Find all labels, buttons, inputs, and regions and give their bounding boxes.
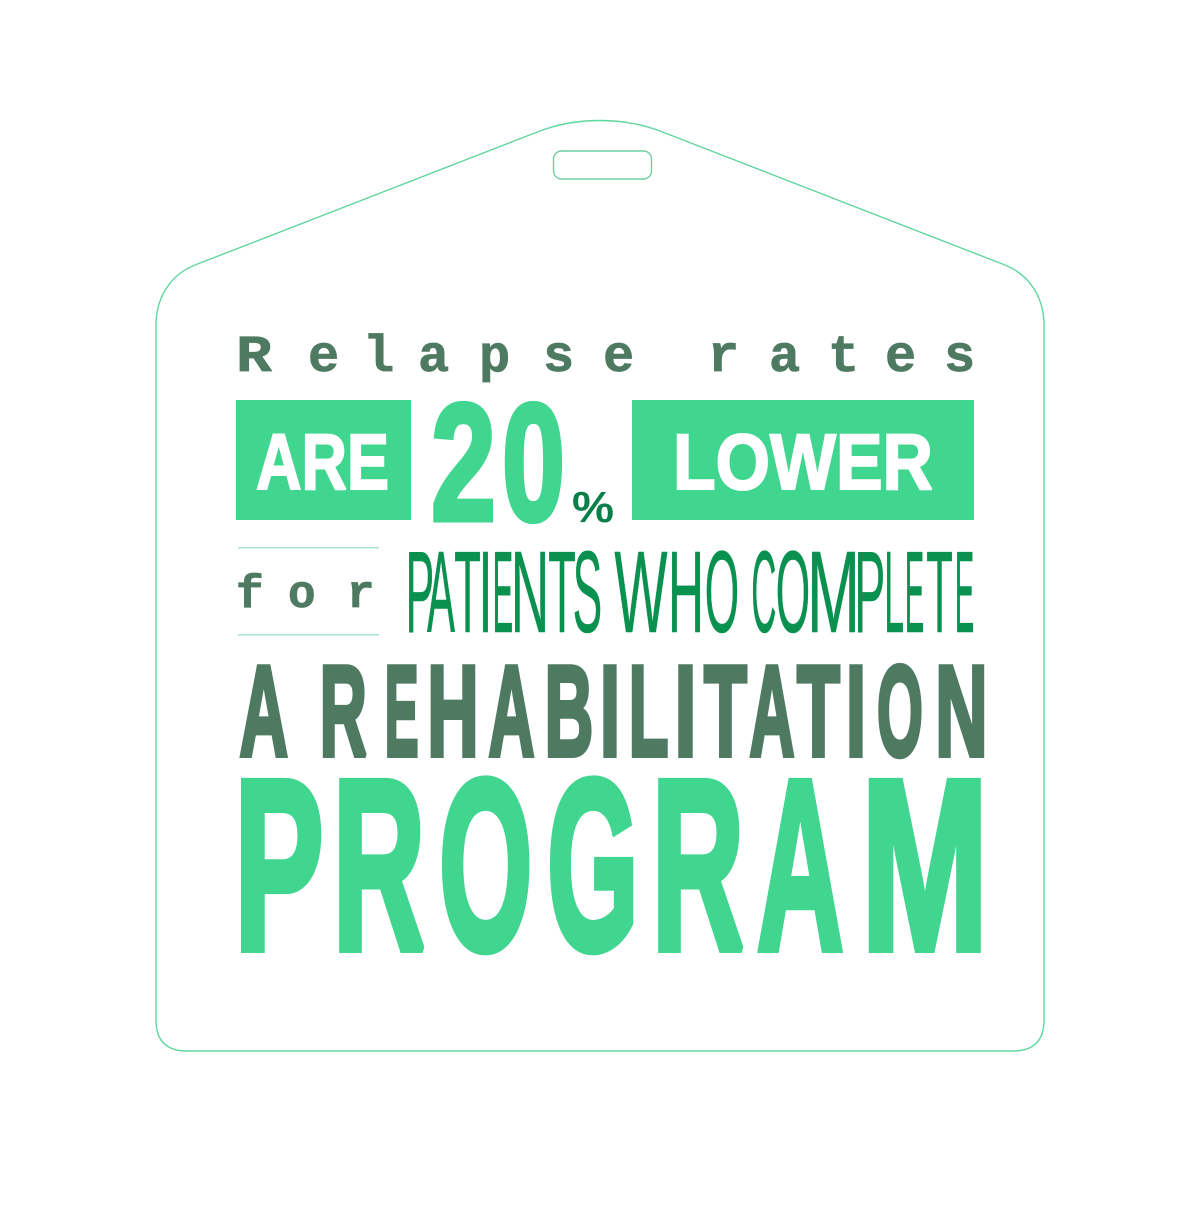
text: program: M bbox=[861, 730, 988, 1001]
text: a rehabilitation: A bbox=[488, 640, 534, 784]
text: a rehabilitation: B bbox=[545, 640, 593, 784]
text: a rehabilitation: I bbox=[600, 640, 620, 784]
text: patients who complete: P bbox=[406, 527, 434, 657]
heading: Relapse rates: p bbox=[479, 328, 510, 387]
text: a rehabilitation: N bbox=[935, 640, 988, 784]
badge outline bbox=[156, 120, 1044, 1051]
text: patients who complete: O bbox=[776, 527, 810, 657]
text: patients who complete: T bbox=[454, 527, 481, 657]
text: patients who complete: C bbox=[751, 527, 776, 657]
statistic: 20% bbox=[431, 370, 614, 556]
text: program: R bbox=[652, 730, 744, 1001]
heading: Relapse rates: r bbox=[708, 328, 739, 387]
heading: Relapse rates: R bbox=[236, 328, 273, 387]
text: patients who complete: H bbox=[668, 527, 704, 657]
heading: Relapse rates: a bbox=[418, 328, 449, 387]
text: a rehabilitation: R bbox=[320, 640, 367, 784]
text: program: A bbox=[757, 730, 844, 1001]
text: patients who complete: T bbox=[926, 527, 953, 657]
text: patients who complete: N bbox=[511, 527, 549, 657]
text: patients who complete: A bbox=[427, 527, 455, 657]
heading: Relapse rates: e bbox=[308, 328, 339, 387]
text: for, between rules: for bbox=[236, 569, 375, 621]
heading: Relapse rates: e bbox=[603, 328, 634, 387]
text: program: G bbox=[547, 730, 639, 1001]
statistic: 20%: % bbox=[572, 483, 614, 532]
text: patients who complete: M bbox=[807, 527, 860, 657]
text: patients who complete: L bbox=[884, 527, 904, 657]
text: patients who complete: S bbox=[573, 527, 602, 657]
panel: ARE label bbox=[236, 400, 411, 520]
text: program: P bbox=[234, 730, 324, 1001]
heading: Relapse rates: e bbox=[885, 328, 916, 387]
text: patients who complete: P bbox=[854, 527, 885, 657]
heading: Relapse rates: l bbox=[363, 328, 394, 387]
text: a rehabilitation: T bbox=[704, 640, 747, 784]
text: a rehabilitation: A bbox=[750, 640, 794, 784]
infographic: ID badge with relapse statistic: E bbox=[955, 527, 974, 657]
text: patients who complete: I bbox=[478, 527, 493, 657]
heading: Relapse rates: s bbox=[543, 328, 574, 387]
badge lanyard slot bbox=[554, 151, 652, 179]
heading: Relapse rates: t bbox=[828, 328, 859, 387]
text: program: O bbox=[439, 730, 532, 1001]
panel: ARE label: ARE bbox=[256, 417, 389, 506]
panel: LOWER label: LOWER bbox=[673, 417, 933, 506]
text: patients who complete: E bbox=[492, 527, 513, 657]
text: a rehabilitation: I bbox=[846, 640, 866, 784]
text: a rehabilitation: A bbox=[240, 640, 286, 784]
text: program: R bbox=[333, 730, 425, 1001]
text: patients who complete: T bbox=[548, 527, 576, 657]
text: a rehabilitation: I bbox=[674, 640, 696, 784]
text: patients who complete: W bbox=[614, 527, 668, 657]
text: patients who complete: O bbox=[705, 527, 739, 657]
text: a rehabilitation: E bbox=[385, 640, 419, 784]
text: a rehabilitation: O bbox=[877, 640, 923, 784]
heading: Relapse rates: s bbox=[944, 328, 975, 387]
text: a rehabilitation: T bbox=[797, 640, 840, 784]
heading: Relapse rates: a bbox=[769, 328, 800, 387]
panel: LOWER label bbox=[632, 400, 974, 520]
statistic: 20%: 2 bbox=[431, 370, 496, 556]
text: a rehabilitation: H bbox=[427, 640, 479, 784]
text: patients who complete: E bbox=[905, 527, 924, 657]
text: a rehabilitation: L bbox=[629, 640, 668, 784]
statistic: 20%: 0 bbox=[502, 370, 565, 556]
